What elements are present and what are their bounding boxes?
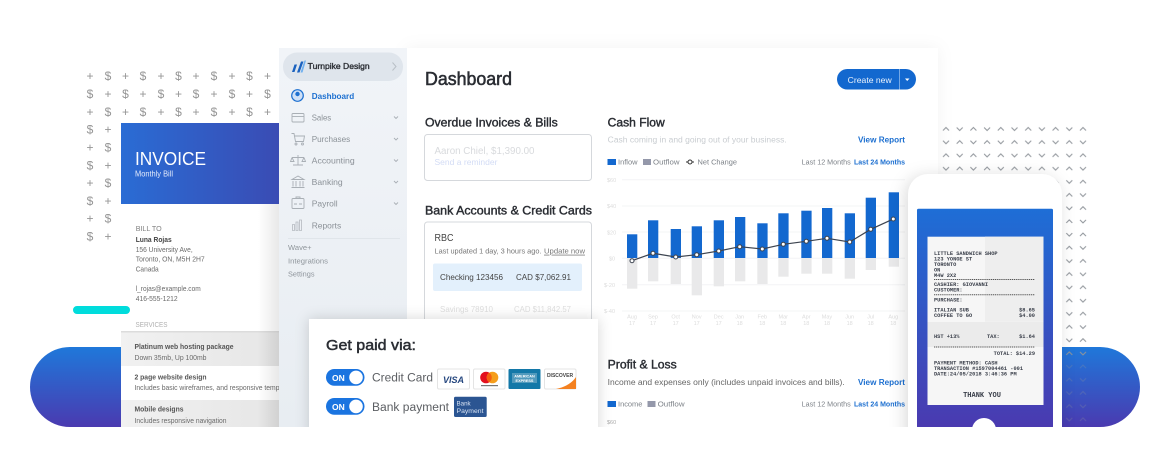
cash flow chart: $-40 [604, 309, 615, 315]
nav: reports [292, 220, 341, 230]
bill to details: 156 University Ave, [136, 245, 193, 254]
secondary nav links: Wave+ [288, 245, 312, 252]
month labels [627, 314, 898, 325]
plus and dollar pattern: $+ [87, 230, 112, 244]
get paid via popup [309, 319, 598, 439]
nav: accounting: Accounting [312, 156, 355, 166]
create new button [837, 69, 916, 90]
nav: purchases: Purchases [312, 134, 350, 144]
phone screen [917, 209, 1053, 428]
visa card [438, 369, 470, 389]
create new button: Create new [848, 75, 893, 85]
services list: Includes basic wireframes, and responsive temp [134, 383, 280, 392]
profit and loss section: Income and expenses only (includes unpaid invoices and bills). [608, 378, 845, 387]
savings row: Savings 78910 [440, 305, 494, 314]
plus and dollar pattern [86, 69, 271, 244]
overdue invoices panel: Aaron Chiel, $1,390.00 [434, 146, 535, 157]
inflow bars [627, 192, 899, 258]
cash flow section [604, 118, 905, 327]
plus and dollar pattern: +$+$+$+$+$+ [86, 69, 271, 83]
profit and loss section: Income [618, 402, 642, 408]
invoice header: Monthly Bill [135, 170, 173, 179]
bill to details: BILL TO [136, 224, 162, 233]
services list: SERVICES [136, 320, 168, 329]
month labels: 18 [890, 321, 896, 327]
nav: dashboard [292, 90, 354, 101]
american express card: EXPRESS [516, 379, 534, 383]
receipt: TRANSACTION #1597004461 -001 [934, 366, 1023, 372]
month labels: Dec [714, 314, 724, 320]
plus and dollar pattern: +$ [86, 176, 112, 190]
profit and loss section: $60 [607, 420, 616, 426]
nav: reports: Reports [312, 220, 341, 230]
overdue invoices panel: Send a reminder [434, 158, 498, 167]
month labels: 18 [847, 321, 853, 327]
receipt: PURCHASE: [934, 298, 963, 304]
company switcher: Turnpike Design [308, 61, 370, 71]
nav: dashboard: Dashboard [312, 91, 354, 101]
bank payment label: Bank payment [372, 402, 450, 414]
net change line [630, 217, 895, 263]
sidebar [279, 48, 407, 427]
month labels: 18 [803, 321, 809, 327]
app window [279, 48, 938, 427]
cash flow section: Cash Flow [608, 118, 665, 130]
savings row: CAD $11,842.57 [514, 305, 572, 314]
receipt: THANK YOU [963, 392, 1001, 400]
receipt [928, 237, 1044, 405]
receipt: CASHIER: GIOVANNI [934, 282, 988, 288]
checking row: CAD $7,062.91 [516, 273, 572, 282]
cash flow chart: $40 [607, 204, 616, 210]
cash flow legend: Last 24 Months [854, 160, 905, 166]
month labels: 17 [716, 321, 722, 327]
bank payment badge: Payment [456, 408, 484, 415]
services list: Includes responsive navigation [134, 416, 226, 425]
bill to details: l_rojas@example.com [136, 284, 201, 293]
plus and dollar pattern: $+ [87, 158, 112, 172]
cash flow chart [604, 178, 905, 327]
nav: sales: Sales [312, 112, 331, 122]
nav: banking: Banking [312, 177, 343, 187]
credit card toggle: ON [332, 373, 345, 383]
visa card: VISA [443, 375, 464, 385]
month labels: Jun [845, 314, 854, 320]
month labels: Nov [692, 314, 702, 320]
bill to details: Luna Rojas [136, 235, 172, 244]
receipt: ITALIAN SUB [934, 308, 970, 314]
overdue invoices panel [424, 118, 592, 180]
profit and loss section [607, 360, 905, 426]
checking row [433, 264, 582, 291]
mastercard [474, 369, 505, 389]
bank payment badge [454, 397, 487, 417]
receipt: TORONTO [934, 262, 956, 268]
overdue invoices panel: Overdue Invoices & Bills [425, 118, 558, 130]
month labels: 18 [759, 321, 765, 327]
month labels: Jan [735, 314, 744, 320]
nav: banking [292, 176, 398, 188]
month labels: Aug [888, 314, 898, 320]
services list: Platinum web hosting package [134, 342, 234, 351]
invoice header [121, 123, 279, 204]
chevron pattern [939, 122, 1090, 424]
month labels: May [822, 314, 832, 320]
month labels: Oct [671, 314, 680, 320]
nav: payroll [292, 197, 398, 208]
cash flow chart: $-20 [604, 283, 615, 289]
cash flow section: View Report [858, 136, 905, 145]
cash flow chart: $20 [607, 230, 616, 236]
month labels: 17 [629, 321, 635, 327]
month labels: 18 [868, 321, 874, 327]
american express card: AMERICAN [514, 374, 535, 378]
month labels: Aug [627, 314, 637, 320]
cash flow legend: Net Change [698, 160, 737, 166]
plus and dollar pattern: $+$+$+$+$+$ [87, 87, 271, 101]
bank accounts panel [424, 205, 592, 319]
month labels: Sep [648, 314, 658, 320]
month labels: Apr [802, 314, 811, 320]
receipt: LITTLE SANDWICH SHOP [934, 251, 998, 257]
secondary nav links: Integrations [288, 258, 329, 266]
bill to details [136, 224, 205, 303]
month labels: Mar [779, 314, 788, 320]
invoice header: INVOICE [135, 148, 206, 169]
outflow bars [627, 258, 899, 295]
receipt: TAX: [987, 334, 1000, 340]
month labels: 18 [824, 321, 830, 327]
services list: 2 page website design [134, 372, 207, 382]
bank accounts panel: Last updated 1 day, 3 hours ago. [434, 247, 542, 256]
cash flow legend: Last 12 Months [802, 160, 851, 166]
nav: sales [292, 112, 398, 122]
company switcher [283, 52, 403, 81]
credit card toggle [326, 369, 364, 386]
bank accounts panel: RBC [434, 233, 454, 244]
phone home button [972, 418, 996, 442]
receipt: PAYMENT METHOD: CASH [934, 361, 998, 367]
receipt: ON [934, 268, 940, 274]
cash flow legend: Outflow [653, 160, 681, 166]
bank accounts panel: Bank Accounts & Credit Cards [425, 206, 592, 218]
month labels: 18 [780, 321, 786, 327]
receipt: $1.64 [1019, 334, 1036, 340]
nav: purchases [292, 134, 398, 145]
plus and dollar pattern: $+ [87, 194, 112, 208]
bill to details: Toronto, ON, M5H 2H7 [136, 254, 205, 264]
nav: payroll: Payroll [312, 198, 338, 208]
blue pill background [30, 347, 1140, 427]
month labels: Feb [758, 314, 767, 320]
plus and dollar pattern: +$ [86, 140, 112, 154]
cash flow chart: $0 [609, 256, 615, 262]
month labels: Jul [867, 314, 874, 320]
profit and loss section: Profit & Loss [608, 360, 677, 372]
month labels: 17 [650, 321, 656, 327]
cash flow section: Cash coming in and going out of your business. [608, 136, 787, 145]
main panel background [598, 347, 908, 427]
savings row [440, 306, 570, 314]
receipt: CUSTOMER: [934, 288, 963, 294]
bill to details: Canada [136, 264, 159, 274]
cash flow chart: $60 [607, 178, 616, 184]
get paid via popup: Get paid via: [326, 337, 416, 354]
teal accent bar [73, 306, 130, 314]
receipt: M4W 2X2 [934, 273, 956, 279]
receipt: COFFEE TO GO [934, 313, 972, 319]
nav: accounting [290, 155, 398, 166]
secondary nav links [288, 245, 329, 278]
month labels: 17 [694, 321, 700, 327]
receipt: DATE:24/05/2018 3:46:36 PM [934, 372, 1017, 378]
bill to details: 416-555-1212 [136, 294, 178, 303]
receipt: $4.00 [1019, 313, 1035, 319]
receipt: $8.65 [1019, 308, 1035, 314]
plus and dollar pattern: $+ [87, 122, 112, 136]
bank payment badge: Bank [456, 400, 472, 408]
profit and loss section: Last 12 Months [802, 402, 851, 408]
receipt: TOTAL: $14.29 [994, 351, 1035, 357]
discover card: DISCOVER [547, 373, 573, 379]
phone body [908, 174, 1062, 458]
receipt: 123 YONGE ST [934, 256, 973, 262]
plus and dollar pattern: +$+$+$+$+$+ [86, 105, 271, 119]
month labels: 18 [737, 321, 743, 327]
checking row: Checking 123456 [440, 273, 504, 282]
profit and loss section: View Report [858, 378, 905, 387]
services list [121, 320, 280, 427]
cash flow legend [608, 159, 905, 166]
cash flow legend: Inflow [618, 160, 638, 166]
receipt: HST +13% [934, 334, 960, 340]
dashboard heading: Dashboard [425, 69, 512, 89]
discover card [544, 369, 576, 389]
profit and loss section: Last 24 Months [854, 402, 905, 408]
services list: Mobile designs [134, 404, 184, 414]
invoice document [121, 123, 280, 427]
bank accounts panel: Update now [544, 247, 586, 256]
secondary nav links: Settings [288, 272, 315, 278]
american express card [508, 369, 540, 389]
services list: Down 35mb, Up 100mb [134, 353, 206, 362]
phone with receipt [908, 174, 1062, 458]
plus and dollar pattern: +$ [86, 212, 112, 226]
credit card label: Credit Card [372, 373, 433, 385]
profit and loss section: Outflow [658, 402, 686, 408]
bank payment toggle [326, 398, 364, 415]
bank payment toggle: ON [332, 402, 345, 412]
month labels: 17 [673, 321, 679, 327]
